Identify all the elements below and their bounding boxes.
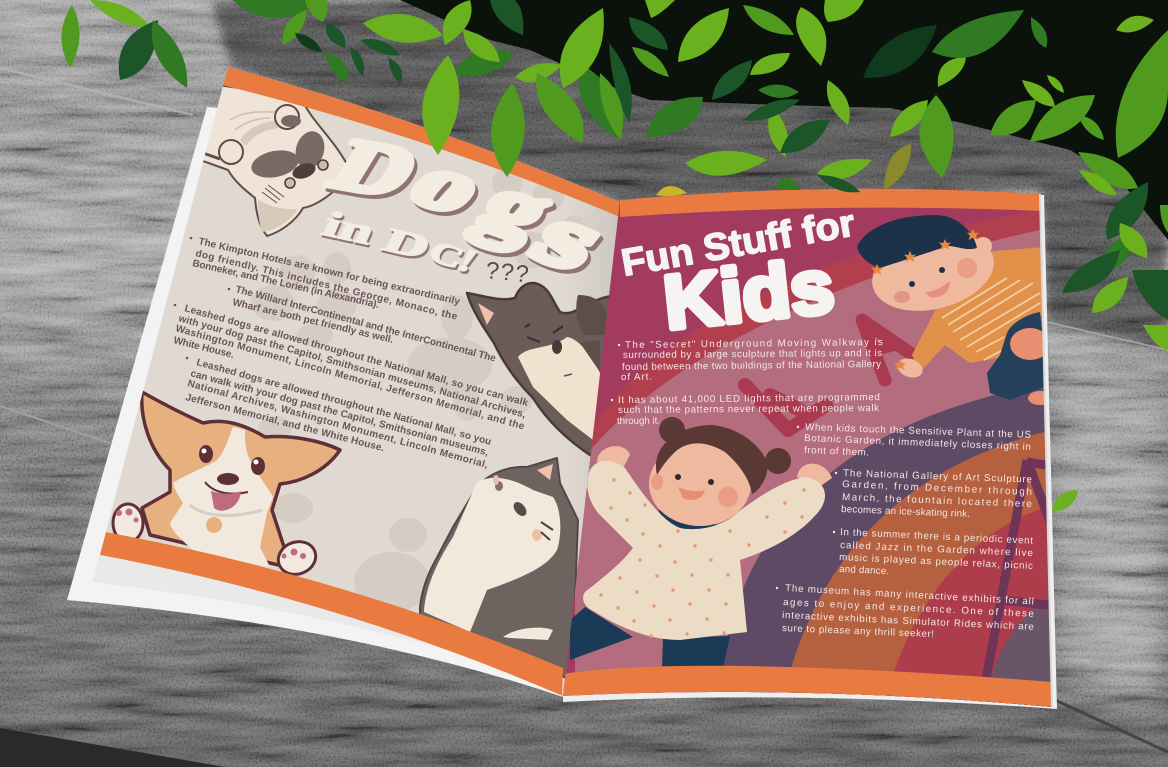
subtitle in DC: in: [317, 204, 381, 252]
bullet: Sensitive Plant: front of them.: [804, 445, 869, 459]
bullet: Secret walkway: found between the two buildings of the National Gallery: [622, 359, 881, 373]
foliage backdrop: [400, 0, 1168, 240]
bullet: Leashed dogs second: Leashed dogs are allowed throughout the National Mall, so you: [195, 357, 492, 448]
bullet: LED lights: such that the patterns never repeat when people walk: [618, 403, 879, 416]
subtitle in DC: [317, 204, 485, 281]
bullet: LED lights: [611, 392, 880, 427]
subtitle in DC: C: [424, 237, 471, 278]
heading word Kids: Kids: [660, 244, 838, 346]
right page text block: [611, 337, 1035, 640]
bullet: Leashed dogs second: National Archives, Washington Monument, Lincoln Memorial,: [186, 378, 489, 471]
title word Dogs: o: [394, 144, 509, 233]
title word Dogs: o: [391, 140, 506, 229]
bullet: Simulator Rides: The museum has many interactive exhibits for all: [785, 583, 1034, 607]
subtitle in DC: D: [376, 221, 438, 266]
bullet: Secret walkway: [618, 337, 883, 383]
bullet: Secret walkway: surrounded by a large sculpture that lights up and it is: [623, 348, 882, 361]
title word Dogs: s: [516, 192, 630, 292]
bullet: Sculpture Garden: [835, 468, 1033, 520]
bullet: Leashed dogs first: Leashed dogs are allowed throughout the National Mall, so you can walk: [183, 303, 530, 409]
bullet: Secret walkway: of Art.: [621, 372, 652, 383]
easel: [985, 460, 1055, 685]
bullet: Jazz in the Garden: [833, 527, 1034, 577]
illustration: french bulldog: [200, 84, 350, 236]
left cluster: [61, 0, 402, 88]
bullet: Sensitive Plant: [797, 422, 1032, 459]
heading: Fun Stuff for Kids: [618, 202, 858, 346]
bottom orange band: [100, 532, 563, 697]
bullet: Jazz in the Garden: In the summer there is a periodic event: [840, 527, 1033, 547]
centre cluster: [363, 0, 622, 177]
bullet: Kimpton Hotels: The Kimpton Hotels are known for being extraordinarily: [197, 236, 461, 308]
bullet: Sensitive Plant: Botanic Garden, it immediately closes right in: [804, 433, 1031, 453]
heading: Dogs in DC: [316, 125, 630, 292]
letter shapes: [745, 320, 910, 430]
question marks: ???: [484, 257, 530, 288]
title word Dogs: g: [463, 162, 576, 260]
illustration: husky dog: [420, 458, 578, 680]
illustration: corgi: [113, 392, 340, 580]
bullet: Willard InterContinental: Wharf are both pet friendly as well.: [231, 297, 395, 346]
bullet: Willard InterContinental: The Willard InterContinental and the InterContinental The: [234, 284, 497, 365]
title word Dogs: D: [319, 129, 437, 216]
bullet: Jazz in the Garden: music is played as people relax, picnic: [839, 552, 1033, 572]
subtitle in DC: !: [453, 245, 485, 281]
right page: fun stuff for kids: [555, 180, 1065, 720]
illustration: boy: [857, 215, 1052, 405]
bullet: Simulator Rides: interactive exhibits has Simulator Rides which are: [782, 610, 1035, 633]
page edge highlight: [1040, 194, 1052, 707]
left page text block: [172, 236, 530, 471]
under pages: white paper stack: [67, 107, 1057, 709]
top orange band: [620, 189, 1041, 217]
subtitle in DC: D: [378, 223, 439, 268]
bullet: Jazz in the Garden: called Jazz in the Garden where live: [840, 540, 1034, 559]
bullet: Kimpton Hotels: Bonneker, and The Lorien (in Alexandria).: [191, 258, 380, 311]
bullet: Leashed dogs second: can walk with your dog past the Capitol, Smithsonian museums,: [189, 368, 490, 459]
bullet: Simulator Rides: sure to please any thrill seeker!: [782, 623, 934, 640]
right cluster: [600, 0, 1168, 512]
title word Dogs: [316, 125, 630, 292]
bullet: Kimpton Hotels: dog friendly. This includes the George, Monaco, the: [194, 248, 459, 323]
bullet: Simulator Rides: [776, 583, 1035, 640]
bottom orange band: [563, 666, 1052, 707]
bullet: Leashed dogs first: White House.: [172, 335, 235, 361]
bullet: Leashed dogs first: Washington Monument, Lincoln Memorial, Jefferson Memorial, and the: [174, 323, 526, 433]
illustration: girl: [570, 417, 832, 668]
magazine spread: [67, 60, 1065, 720]
title word Dogs: g: [460, 158, 573, 256]
title word Dogs: s: [513, 188, 627, 288]
bullet: Jazz in the Garden: and dance.: [839, 564, 889, 577]
foliage leaves: [61, 0, 1168, 512]
bullet: Secret walkway: The "Secret" Underground Moving Walkway is: [625, 337, 883, 351]
bullet: LED lights: through it.: [617, 416, 660, 427]
title word Dogs: D: [316, 125, 434, 212]
top orange band: [222, 67, 622, 217]
subtitle in DC: in: [318, 206, 383, 255]
bullet: Sensitive Plant: When kids touch the Sensitive Plant at the US: [805, 422, 1032, 441]
bullet: Sculpture Garden: March, the fountain located there: [842, 492, 1033, 510]
bullet: Sculpture Garden: becomes an ice-skating rink.: [841, 504, 970, 520]
paw print background: [251, 168, 589, 612]
background rainbow arcs: [555, 180, 1065, 720]
bullet: LED lights: It has about 41,000 LED lights that are programmed: [618, 392, 880, 406]
bullet: Sculpture Garden: Garden, from December through: [842, 479, 1032, 498]
subtitle in DC: C: [423, 235, 470, 275]
bullet: Leashed dogs first: with your dog past the Capitol, Smithsonian museums, National Archives,: [176, 313, 527, 421]
bullet: Sculpture Garden: The National Gallery of Art Sculpture: [843, 468, 1033, 486]
illustration: shiba dog: [467, 283, 614, 470]
subtitle in DC: !: [451, 242, 484, 279]
bullet: Simulator Rides: ages to enjoy and experience. One of these: [783, 597, 1035, 620]
left page: dogs in DC: [90, 60, 630, 710]
heading line Fun Stuff for: Fun Stuff for: [618, 202, 858, 285]
bullet: Leashed dogs second: Jefferson Memorial, and the White House.: [184, 392, 386, 454]
